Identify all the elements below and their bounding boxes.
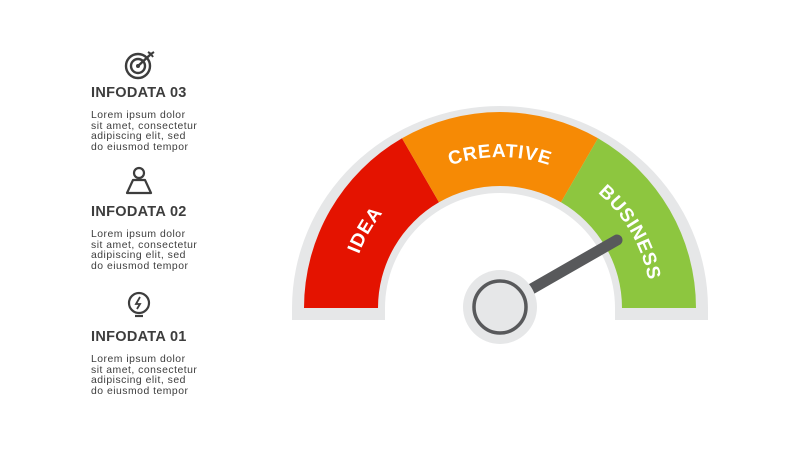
- text block: infodata 03: adipiscing elit, sed: [91, 131, 186, 142]
- hub: [463, 270, 537, 344]
- text block: infodata 03: [91, 85, 197, 153]
- text block: infodata 03: sit amet, consectetur: [91, 121, 197, 132]
- text block: infodata 01: Lorem ipsum dolor: [91, 354, 186, 365]
- icon: lightbulb: [128, 292, 150, 318]
- icon: target: [124, 51, 154, 80]
- text block: infodata 02: sit amet, consectetur: [91, 240, 197, 251]
- text block: infodata 02: Lorem ipsum dolor: [91, 229, 186, 240]
- labels: [347, 144, 660, 278]
- needle: [500, 240, 617, 307]
- text block: infodata 03: do eiusmod tempor: [91, 142, 188, 153]
- text block: infodata 01: [91, 329, 197, 397]
- labels: BUSINESS: [598, 184, 660, 278]
- labels: IDEA: [347, 209, 382, 254]
- text block: infodata 01: adipiscing elit, sed: [91, 375, 186, 386]
- icon: person: [126, 166, 152, 194]
- segment: idea: [304, 138, 439, 308]
- text block: infodata 02: [91, 204, 197, 272]
- text block: infodata 02: INFODATA 02: [91, 204, 187, 220]
- text block: infodata 01: INFODATA 01: [91, 329, 187, 345]
- segment: creative: [402, 112, 598, 202]
- text block: infodata 02: adipiscing elit, sed: [91, 250, 186, 261]
- text block: infodata 03: Lorem ipsum dolor: [91, 110, 186, 121]
- text block: infodata 02: do eiusmod tempor: [91, 261, 188, 272]
- text block: infodata 01: do eiusmod tempor: [91, 386, 188, 397]
- gauge grey frame: [292, 106, 708, 320]
- text block: infodata 03: INFODATA 03: [91, 85, 187, 101]
- labels: CREATIVE: [448, 144, 552, 165]
- text block: infodata 01: sit amet, consectetur: [91, 365, 197, 376]
- segment: business: [561, 138, 696, 308]
